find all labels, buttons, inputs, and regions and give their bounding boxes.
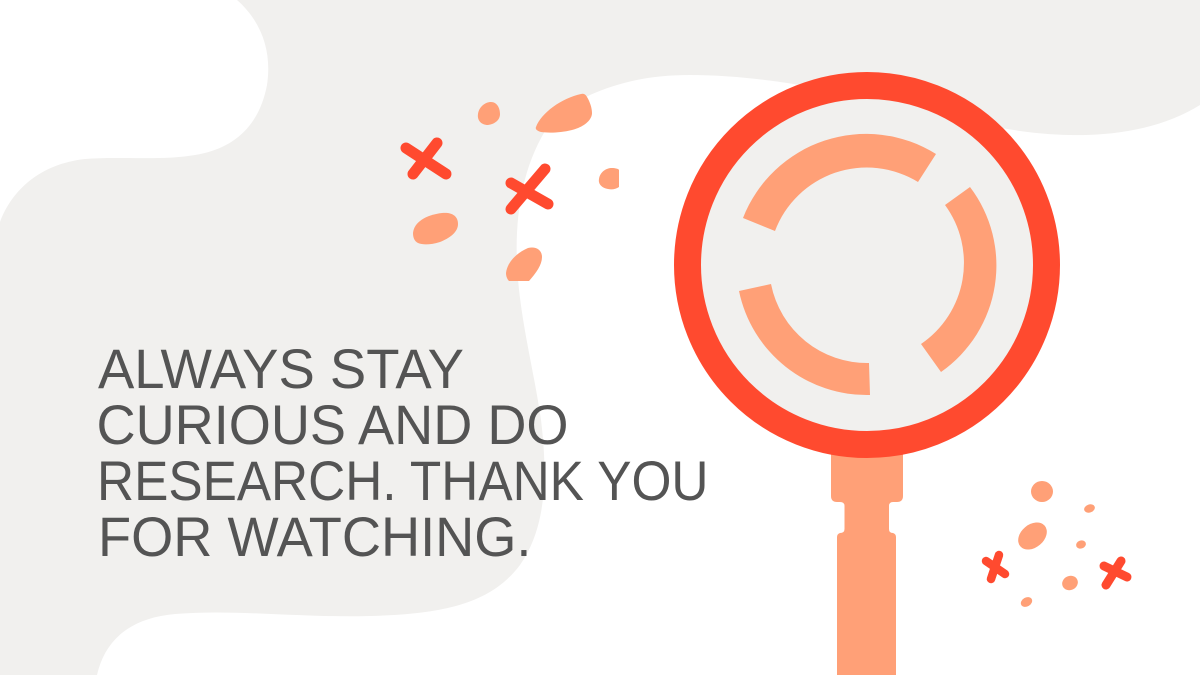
magnifying glass [688,86,1046,675]
headline text: ALWAYS STAY [98,338,464,400]
lens ring [688,86,1046,444]
lens arc: right [921,187,996,372]
headline text: RESEARCH. THANK YOU [97,450,708,512]
cross mark 1 [406,143,446,174]
blob: small round [478,102,500,125]
blob: large top [536,94,592,133]
lens arc: bottom left [739,284,870,395]
blob: lower left [413,213,458,244]
blob: lower [1060,573,1080,593]
lens arc: top [743,134,936,231]
blob: tiny centre [1075,539,1087,550]
headline text: CURIOUS AND DO [96,394,568,456]
headline text: FOR WATCHING. [98,506,532,568]
blob: bottom [1019,595,1034,609]
scattered marks: lower right [986,481,1127,609]
cross mark left [986,555,1005,579]
cross mark right [1104,561,1127,585]
scattered marks: upper left [406,94,619,281]
headline text [96,338,708,568]
blob: small right [1083,503,1096,514]
blob: clipped right [599,168,619,189]
blob: large centre [1013,517,1052,555]
blob: top [1031,481,1053,502]
handle [831,450,903,675]
blob: clipped bottom [506,247,542,281]
cross mark 2 [511,169,548,209]
